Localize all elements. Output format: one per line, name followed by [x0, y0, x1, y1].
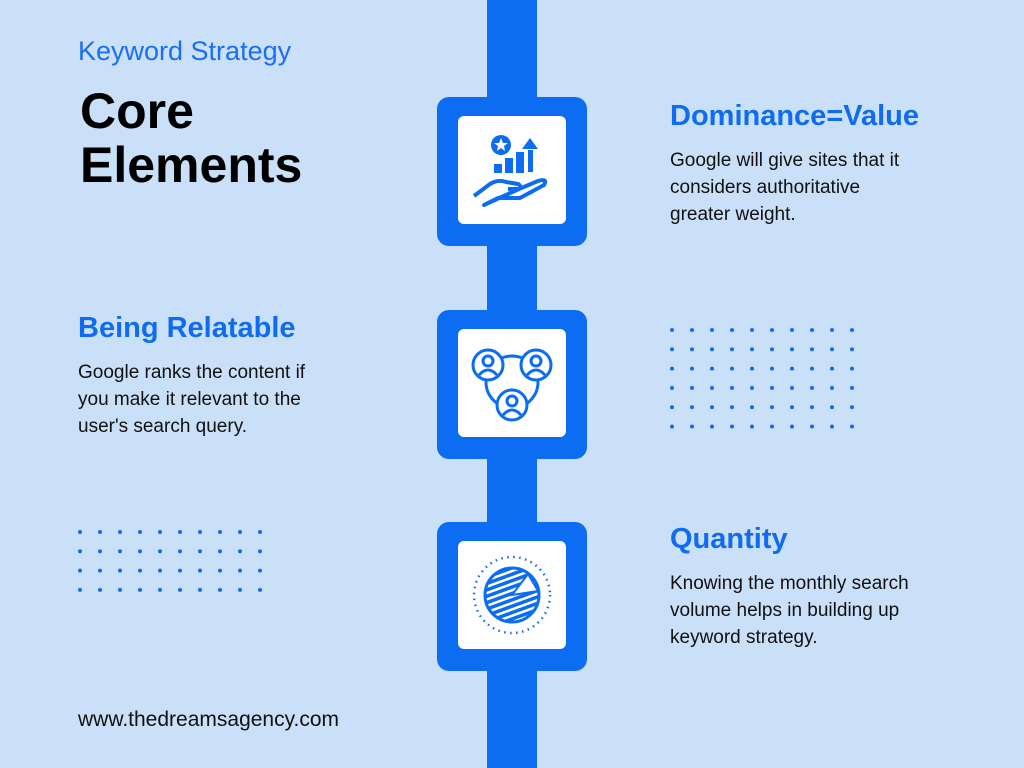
text: Dominance: Google will give sites that it: [670, 150, 899, 171]
text: Being Relatable: you make it relevant to the: [78, 389, 301, 410]
text: Dominance: [670, 100, 919, 225]
text: Being Relatable: [78, 312, 306, 437]
box: people icon: [437, 310, 587, 459]
text: Quantity: volume helps in building up: [670, 600, 899, 621]
title: Core: [80, 83, 194, 139]
dots right: [670, 328, 854, 429]
dots left: [78, 530, 262, 592]
icon: hand chart: [472, 135, 548, 208]
icon: pie chart: [472, 556, 552, 634]
vertical bar: [487, 0, 537, 768]
text: Quantity: Knowing the monthly search: [670, 573, 909, 594]
text: Being Relatable: user's search query.: [78, 416, 247, 437]
box: growth icon: [437, 97, 587, 246]
text: Quantity: keyword strategy.: [670, 627, 817, 648]
icon: network people: [472, 348, 552, 422]
box: pie icon: [437, 522, 587, 671]
title: Elements: [80, 137, 302, 193]
footer url: www.thedreamsagency.com: [78, 708, 339, 731]
text: Quantity: [670, 523, 909, 648]
title: [80, 83, 302, 193]
text: Being Relatable: Google ranks the content if: [78, 362, 305, 383]
text: Dominance: considers authoritative: [670, 177, 860, 198]
text: Being Relatable: Being Relatable: [78, 312, 296, 344]
text: Dominance: Dominance=Value: [670, 100, 919, 132]
text: Dominance: greater weight.: [670, 204, 796, 225]
subtitle: Keyword Strategy: [78, 36, 291, 66]
text: Quantity: Quantity: [670, 523, 788, 555]
